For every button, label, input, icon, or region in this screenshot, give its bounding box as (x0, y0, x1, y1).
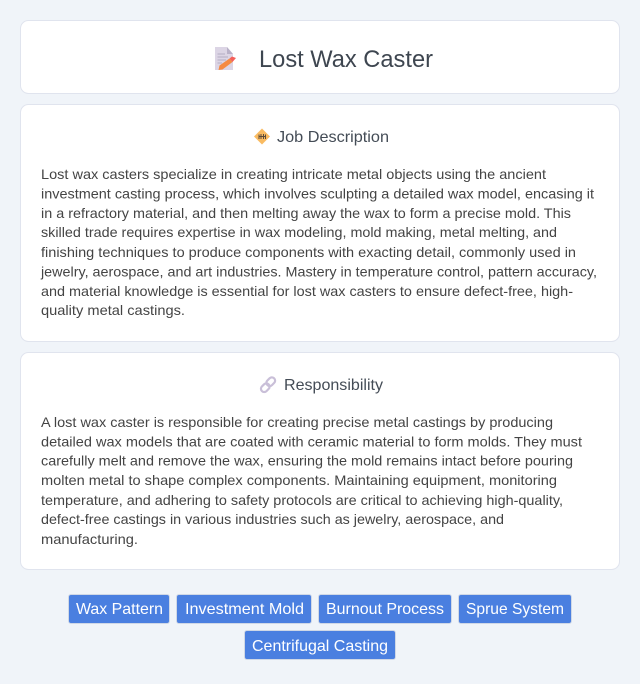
heading: responsibility: Responsibility (284, 377, 383, 394)
tag: wax pattern (68, 594, 170, 624)
text: responsibility body: temperature, and adhering to safety protocols are critical to achieving high-quality, (41, 492, 563, 508)
text: job description body: finishing techniques to produce components with exacting detail, commonly used in (41, 244, 576, 260)
tag: burnout process (318, 594, 452, 624)
text: responsibility body (41, 414, 582, 547)
tag: centrifugal casting (244, 630, 396, 660)
text: responsibility body: defect-free castings in various industries such as jewelry, aerospace, and (41, 511, 504, 527)
text: job description body: in a refractory material, and then melting away the wax to form a precise mold. This (41, 205, 571, 221)
icon: chain link (260, 376, 276, 393)
tag: investment mold (176, 594, 312, 624)
title: Lost Wax Caster (259, 46, 433, 73)
text: responsibility body: detailed wax models that are coated with ceramic material to form molds. They must (41, 434, 582, 450)
tag: centrifugal casting: Centrifugal Casting (252, 638, 388, 655)
icon: document with pencil (215, 47, 236, 70)
tag: wax pattern: Wax Pattern (76, 601, 163, 618)
text: responsibility body: carefully melt and remove the wax, ensuring the mold remains intact before pouring (41, 452, 573, 468)
text: job description body: jewelry, aerospace, and art industries. Mastery in temperature control, pattern accuracy, (40, 264, 597, 280)
panel: responsibility (20, 352, 620, 570)
tag: investment mold: Investment Mold (185, 601, 304, 618)
text: job description body: and material knowledge is essential for lost wax casters to ensure defect-free, high- (41, 283, 573, 299)
heading: job description: Job Description (277, 129, 389, 146)
text: responsibility body: molten metal to shape complex components. Maintaining equipment, monitoring (41, 472, 557, 488)
text: responsibility body: A lost wax caster is responsible for creating precise metal castings by producing (41, 414, 553, 430)
icon: diamond sign (254, 128, 270, 144)
text: job description body (40, 166, 597, 318)
text: responsibility body: manufacturing. (41, 531, 138, 547)
text: job description body: Lost wax casters specialize in creating intricate metal objects using the ancient (41, 166, 546, 182)
text: job description body: quality metal castings. (41, 302, 185, 318)
panel: title card (20, 20, 620, 94)
panel: job description (20, 104, 620, 342)
text: job description body: skilled trade requires expertise in wax modeling, mold making, metal melting, and (41, 224, 557, 240)
tag: burnout process: Burnout Process (326, 601, 444, 618)
tag: sprue system: Sprue System (466, 601, 564, 618)
tag: sprue system (458, 594, 572, 624)
text: job description body: investment casting process, which involves sculpting a detailed wax model, encasing it (41, 186, 594, 202)
